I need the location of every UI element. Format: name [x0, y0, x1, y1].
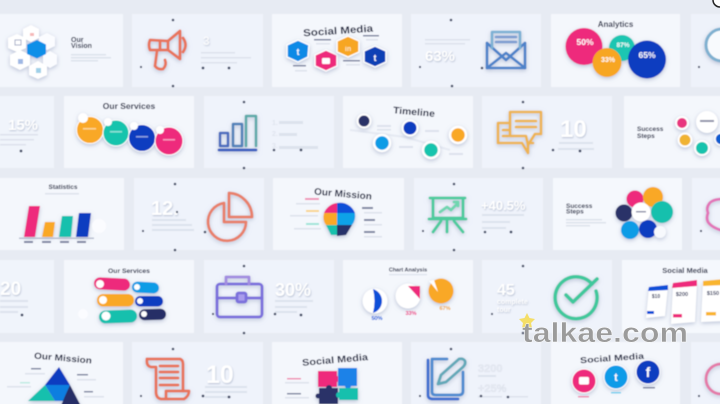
panel: chart analysis: 67% [439, 306, 451, 312]
panel: success steps partial: Steps [637, 133, 655, 140]
panel: social media hexagons [272, 14, 402, 87]
panel: statistics [0, 178, 124, 250]
big number: 30% [275, 280, 311, 300]
panel: chart analysis [343, 260, 473, 333]
panel: our services circles [64, 96, 194, 168]
chart: triangle [28, 367, 82, 404]
chart: pricing column two [671, 283, 697, 324]
panel: pen pad [411, 342, 541, 404]
heading: Social Media [662, 266, 709, 275]
icon: facebook: f [646, 364, 651, 380]
panel: pricing social media: $150 [707, 291, 719, 297]
panel: scroll [132, 342, 263, 404]
panel: presentation board [414, 178, 543, 250]
panel: 20 [0, 260, 54, 333]
big number: 12. [151, 198, 179, 220]
heading: Social Media [302, 352, 369, 369]
chart: bar chart [24, 206, 91, 237]
heading: Our Mission [314, 186, 373, 203]
panel: pen pad: +25% [478, 383, 507, 395]
icon: linkedin hexagon: in [345, 46, 351, 53]
panel: pricing social media [622, 260, 720, 333]
chart: bubbles [566, 28, 666, 78]
big number: 20 [0, 279, 21, 300]
icon: presentation board [429, 198, 466, 232]
icon: scroll [147, 359, 189, 399]
panel: timeline [343, 96, 473, 168]
icon: check circle [555, 277, 597, 319]
heading: Our Services [108, 268, 150, 275]
panel: pricing social media: $10 [652, 294, 660, 300]
icon: pink circle [706, 364, 720, 394]
panel: check: complete [497, 299, 528, 306]
icon: tumblr hexagon: t [374, 53, 376, 63]
heading: Analytics [598, 20, 634, 29]
panel: analytics: 33% [601, 57, 616, 64]
heading: Social Media [303, 24, 374, 39]
panel: bar icon: 3. [272, 143, 278, 150]
panel: analytics: 87% [616, 42, 630, 49]
heading: Our Services [103, 101, 155, 111]
panel: briefcase [204, 260, 334, 333]
big number: 10 [206, 361, 234, 389]
panel: success steps partial [624, 96, 720, 168]
list: 1. [272, 120, 278, 127]
panel: our services pills [64, 260, 194, 333]
panel: chat [482, 96, 612, 168]
chart: pills [94, 277, 166, 324]
big number: 10 [560, 116, 587, 143]
heading: Success [637, 126, 664, 133]
icon: briefcase [217, 277, 262, 317]
panel: our vision [0, 14, 123, 87]
heading: Statistics [49, 184, 78, 191]
panel: check: tour [497, 307, 511, 314]
panel: social media puzzle [272, 342, 402, 404]
icon: pie chart [208, 193, 252, 241]
panel: our mission triangle [0, 342, 123, 404]
watermark: talkae.com [522, 317, 688, 348]
icon: twitter hexagon: t [296, 47, 300, 57]
icon: pink outline [707, 199, 720, 231]
icon: ring [706, 29, 720, 61]
chart: pie 33 [396, 284, 420, 308]
panel: bar icon [204, 96, 334, 168]
panel: success steps flower: Steps [566, 208, 584, 216]
chart: pie 67 [428, 278, 454, 304]
heading: Social Media [580, 351, 645, 365]
big number: 15% [8, 117, 38, 134]
big number: +40.5% [481, 198, 526, 213]
panel: bar icon: 2. [272, 131, 278, 138]
icon: corner badge [713, 0, 720, 7]
chart: circles [76, 113, 183, 155]
panel: megaphone [132, 14, 263, 87]
panel: pricing social media: $200 [676, 292, 688, 298]
big number: 63% [425, 48, 455, 65]
big number: 3200 [478, 363, 502, 375]
icon: megaphone [149, 31, 186, 69]
big number: 3 [203, 34, 210, 48]
heading: Our Mission [34, 350, 92, 366]
icon: chat bubbles [498, 112, 541, 153]
heading: Chart Analysis [389, 268, 427, 274]
chart: pricing column three [701, 281, 720, 322]
panel: our vision: Vision [71, 43, 92, 50]
icon: pen and pad [428, 359, 465, 399]
icon: twitter: t [614, 372, 618, 384]
heading: Our [71, 37, 84, 44]
panel: our mission bulb [273, 178, 404, 250]
panel: analytics [551, 14, 680, 87]
panel: 15 percent [0, 96, 54, 168]
icon: hexagon cluster [8, 25, 57, 79]
chart: pie 50 [362, 288, 388, 314]
heading: Success [566, 203, 593, 210]
icon: yellow star [519, 313, 535, 328]
panel: pie icon [134, 178, 264, 250]
icon: bulb [323, 203, 355, 236]
panel: success steps flower [553, 178, 682, 250]
panel: social media circles [551, 342, 680, 404]
icon: youtube hexagon [315, 50, 337, 71]
icon: youtube [572, 369, 596, 393]
panel: analytics: 50% [576, 37, 594, 47]
big number: 45 [497, 282, 515, 299]
icon: bar chart [219, 116, 256, 150]
panel: chart analysis: 50% [371, 316, 383, 322]
panel: partial pink circle [691, 342, 720, 404]
heading: Timeline [393, 105, 435, 120]
chart: pricing column one [646, 286, 668, 318]
panel: chart analysis: 33% [405, 311, 417, 317]
panel: partial pink icon [692, 178, 720, 250]
chart: timeline nodes [358, 114, 466, 158]
panel: check [482, 260, 612, 333]
chart: flower [616, 187, 673, 239]
panel: analytics: 65% [638, 50, 656, 60]
chart: step circles [676, 111, 720, 155]
panel: envelope [411, 14, 541, 87]
icon: envelope [487, 32, 525, 68]
icon: puzzle [316, 368, 358, 404]
panel: partial ring [691, 14, 720, 87]
